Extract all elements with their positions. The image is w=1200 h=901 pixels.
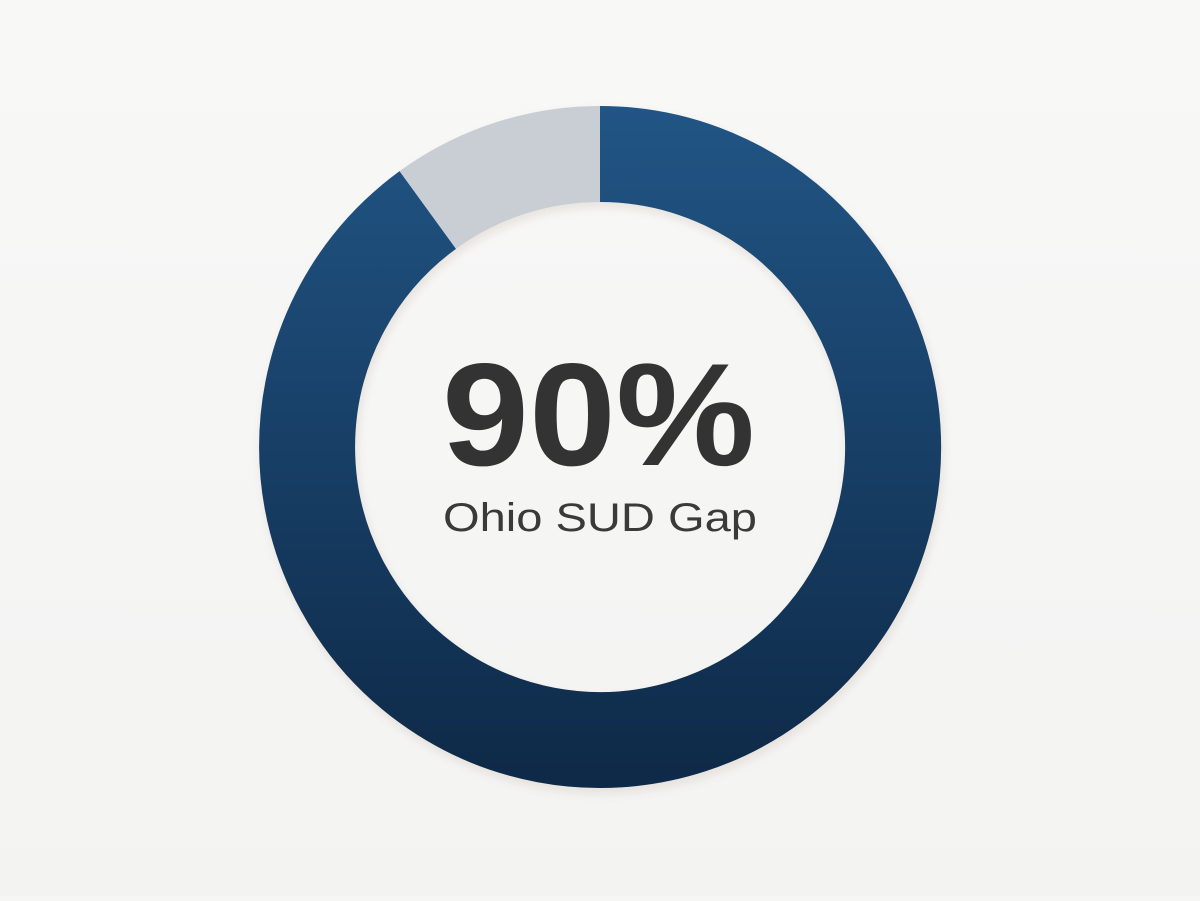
center value: 90% bbox=[442, 333, 755, 496]
center label: Ohio SUD Gap bbox=[443, 496, 757, 540]
donut chart bbox=[307, 154, 895, 745]
gray segment 10% bbox=[428, 154, 600, 210]
blue segment 90% bbox=[307, 154, 893, 740]
